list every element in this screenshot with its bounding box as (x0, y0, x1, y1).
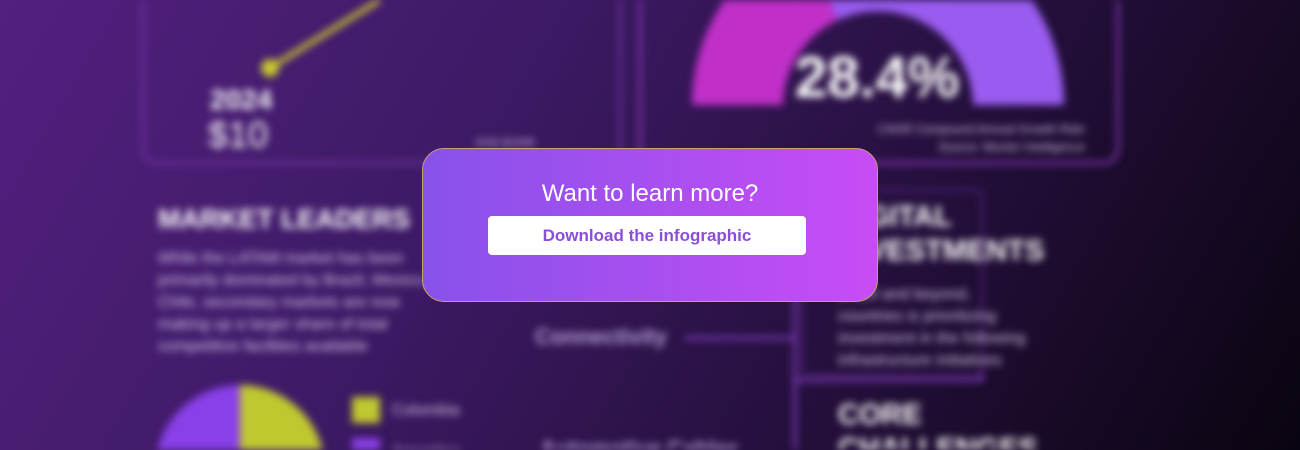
blurred background infographic: INVESTMENTS (838, 235, 1044, 267)
connector lines (685, 160, 982, 450)
blurred background infographic: 28.4% (795, 45, 959, 110)
heading: Want to learn more? (542, 180, 758, 207)
blurred background infographic: Chile, secondary markets are now (158, 294, 400, 311)
blurred background infographic: Connectivity (535, 324, 667, 349)
blurred background infographic: While the LATAM market has been (158, 250, 404, 267)
button (488, 216, 806, 255)
blurred background infographic: Brazil and beyond, (838, 286, 971, 303)
panel: growth chart (143, 0, 620, 163)
button: Download the infographic (543, 226, 751, 245)
blurred background infographic: Colombia (392, 402, 460, 419)
blurred background infographic: competitive facilities available (158, 338, 368, 355)
blurred background infographic: making up a larger share of total (158, 316, 387, 333)
blurred background infographic: CORE (838, 399, 922, 431)
blurred background infographic: DIGITAL (838, 201, 952, 233)
callout card (422, 148, 878, 302)
blurred background infographic: countries is prioritizing (838, 308, 996, 325)
blurred background infographic: primarily dominated by Brazil, Mexico, (158, 272, 427, 289)
blurred background infographic: Source: Mordor Intelligence (938, 140, 1085, 154)
pie chart (155, 385, 380, 450)
blurred background infographic: 2030 $150B (475, 137, 534, 149)
blurred background infographic: $10 (208, 114, 268, 155)
blurred background infographic: 2024 (210, 84, 272, 115)
blurred background infographic: infrastructure initiatives (838, 352, 1002, 369)
blurred background infographic: CAGR Compound Annual Growth Rate (878, 122, 1085, 136)
panel: donut gauge (640, 0, 1118, 163)
blurred background infographic: investment in the following (838, 330, 1026, 347)
blurred background infographic: MARKET LEADERS (158, 204, 410, 234)
